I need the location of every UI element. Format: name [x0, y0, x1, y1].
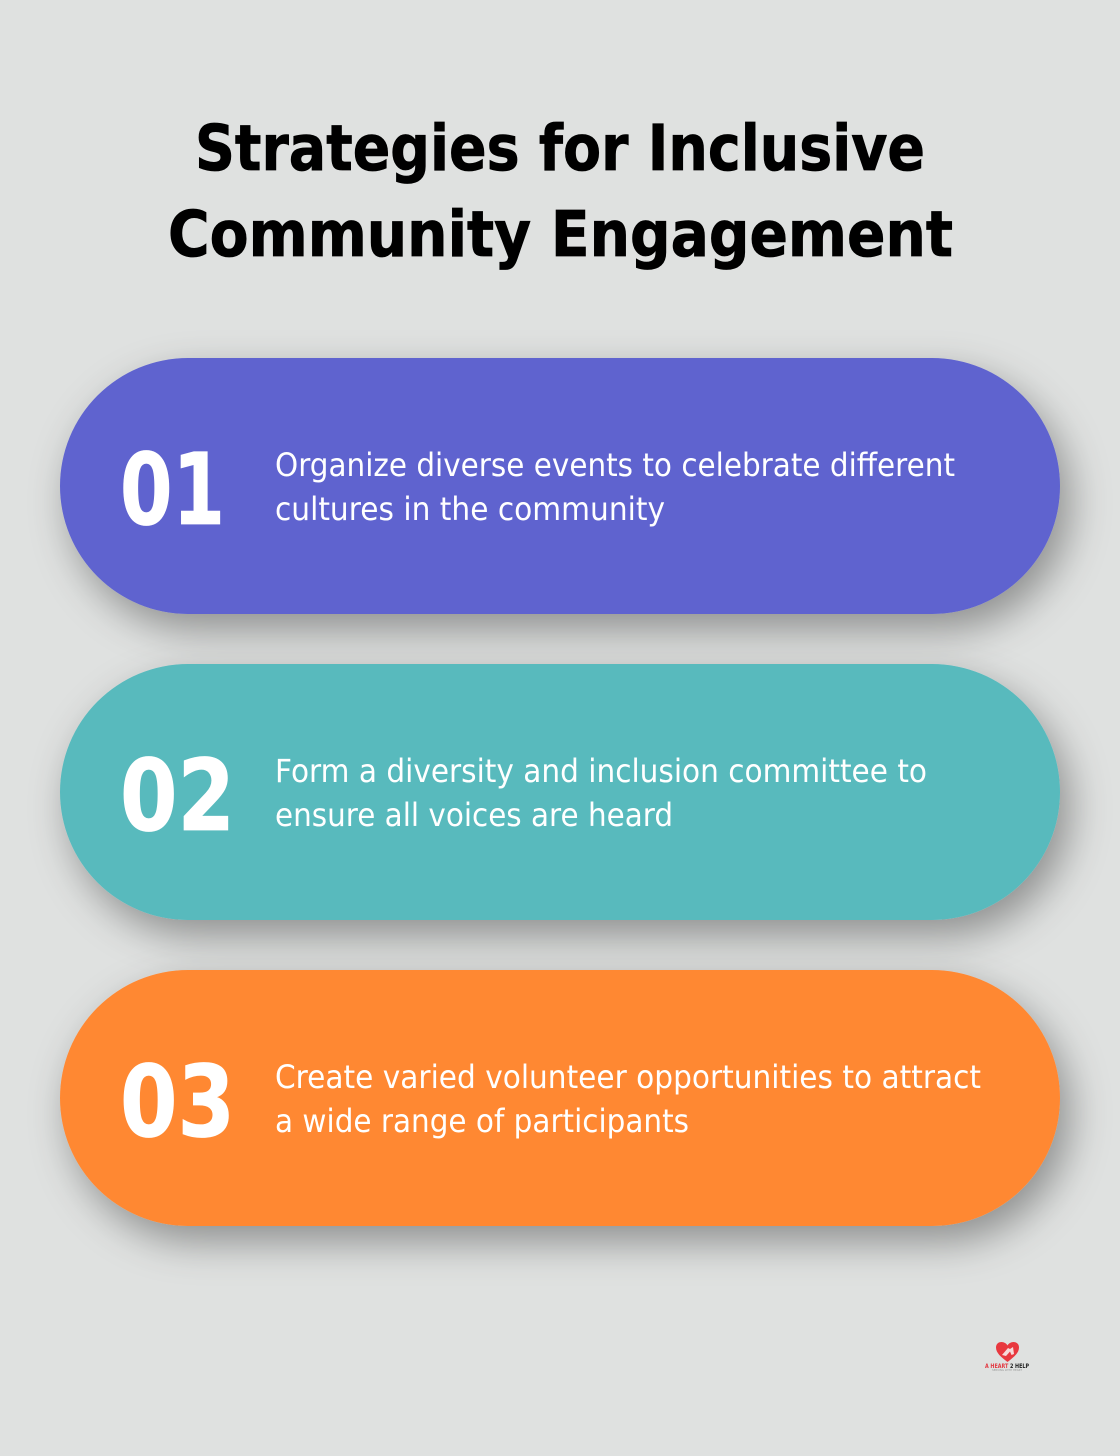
panel: strategy 02 [60, 664, 1060, 920]
pill background 01 [60, 358, 1060, 614]
text block 03: Create varied volunteer opportunities to attract [275, 1058, 981, 1096]
number 02: 02 [120, 739, 235, 854]
title: Strategies for Inclusive [195, 112, 925, 185]
icon: heart [996, 1342, 1019, 1362]
text block 03: a wide range of participants [275, 1102, 689, 1140]
text block 02 [275, 752, 927, 834]
title [168, 112, 953, 271]
pill background 02 [60, 664, 1060, 920]
text block 01: Organize diverse events to celebrate different [275, 446, 955, 484]
logo tagline: SERVING WITH HEART [992, 1368, 1023, 1372]
panel: strategy 03 [60, 970, 1060, 1226]
panel: strategy 01 [60, 358, 1060, 614]
pill background 03 [60, 970, 1060, 1226]
number 03: 03 [120, 1045, 235, 1160]
text block 03 [275, 1058, 981, 1140]
number 01: 01 [120, 433, 225, 548]
logo: A Heart 2 Help [985, 1342, 1029, 1372]
text block 01: cultures in the community [275, 490, 665, 528]
text block 02: Form a diversity and inclusion committee to [275, 752, 927, 790]
text block 01 [275, 446, 955, 528]
logo wordmark: A HEART 2 HELP [985, 1362, 1029, 1370]
text block 02: ensure all voices are heard [275, 796, 673, 834]
title: Community Engagement [168, 198, 953, 271]
